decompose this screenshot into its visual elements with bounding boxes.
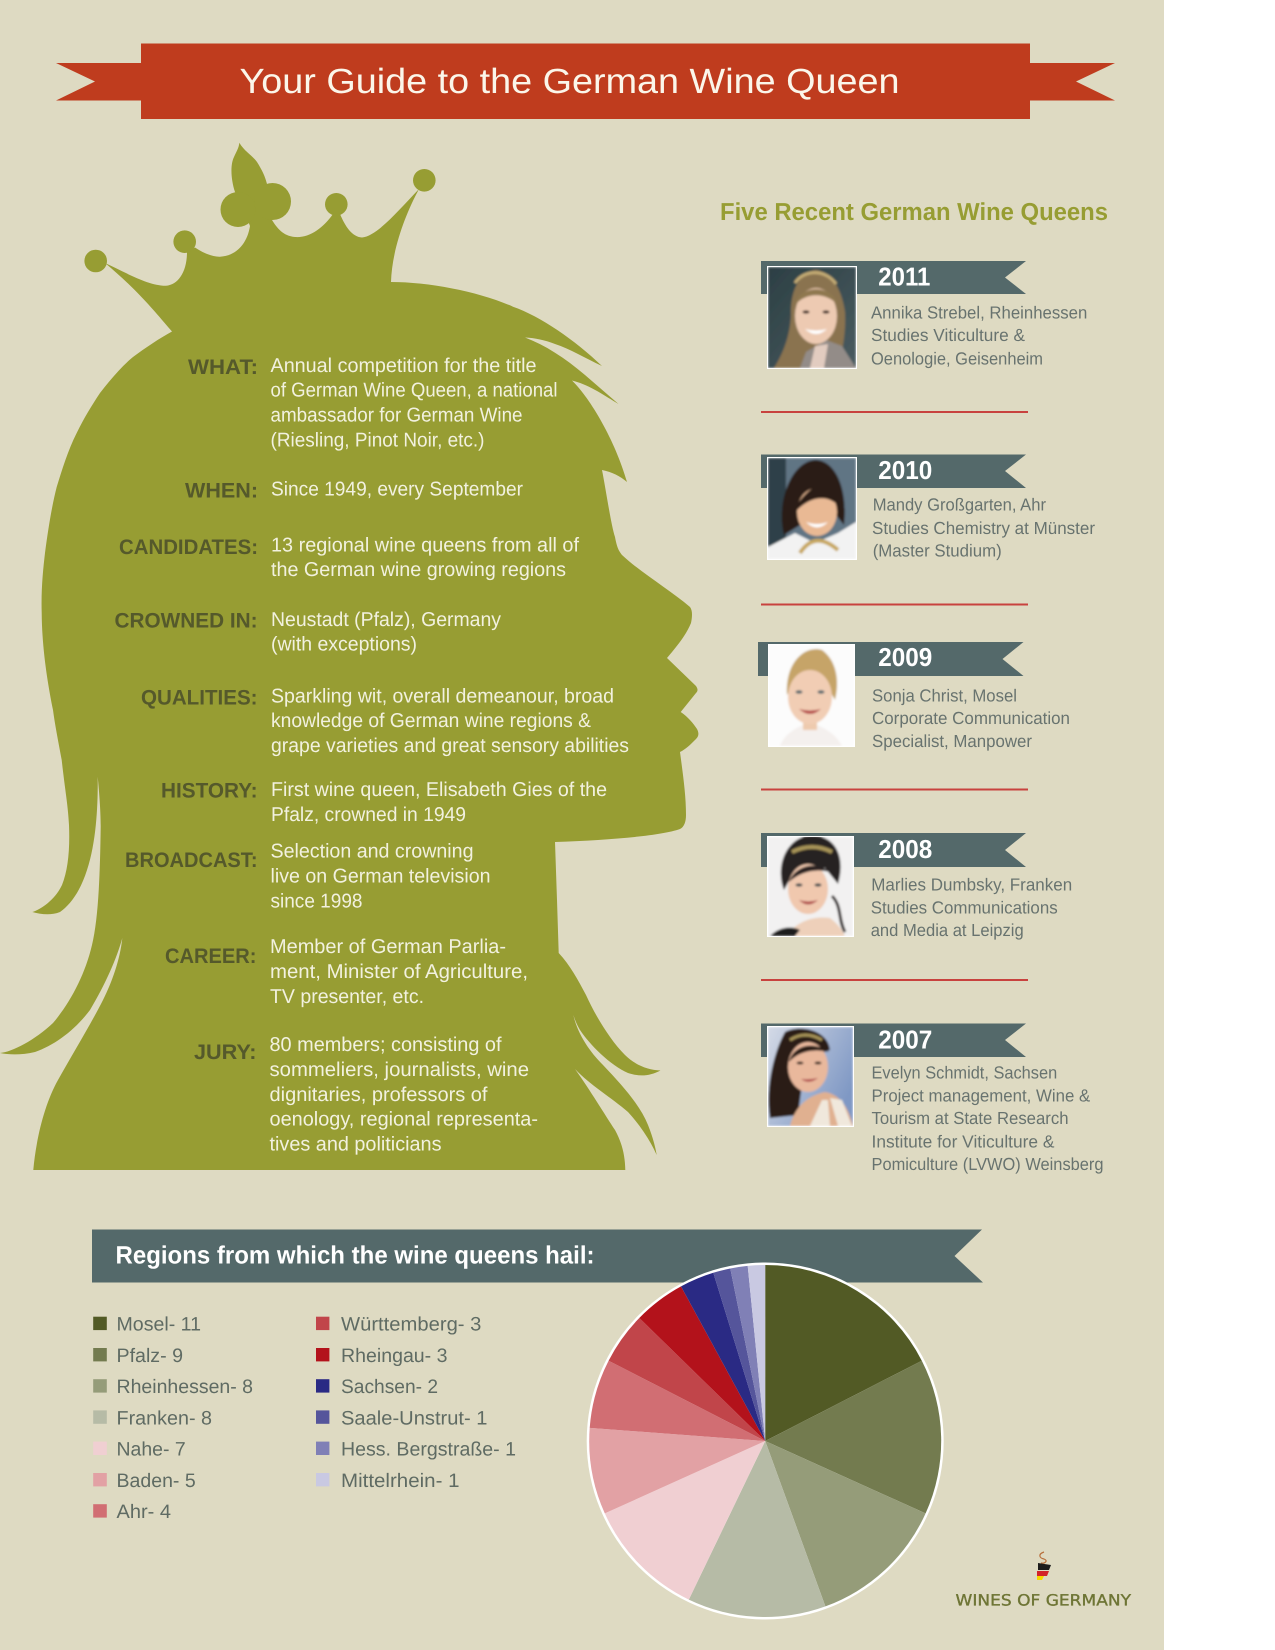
legend column 1: Ahr- 4 bbox=[116, 1501, 171, 1523]
panel: queen silhouette with facts bbox=[0, 143, 698, 1170]
bio 2007: Project management, Wine & bbox=[872, 1086, 1091, 1106]
fact: candidates: CANDIDATES: bbox=[119, 536, 258, 559]
photo 2009 bbox=[768, 644, 855, 747]
pie chart: regions bbox=[587, 1262, 944, 1620]
bio 2008: Marlies Dumbsky, Franken bbox=[871, 875, 1072, 895]
title banner bbox=[56, 44, 1115, 119]
panel: queen 2009 bbox=[758, 642, 1070, 751]
bio 2009: Corporate Communication bbox=[872, 708, 1070, 728]
fact: jury bbox=[194, 1034, 538, 1156]
legend column 1: Franken- 8 bbox=[116, 1407, 212, 1429]
fact: what: of German Wine Queen, a national bbox=[270, 380, 558, 402]
fact: jury: sommeliers, journalists, wine bbox=[270, 1059, 529, 1081]
fact: broadcast bbox=[125, 840, 490, 912]
fact: crowned in: CROWNED IN: bbox=[114, 610, 258, 632]
fact: jury: JURY: bbox=[194, 1041, 256, 1064]
legend column 1: Rheinhessen- 8 bbox=[116, 1376, 253, 1398]
bio 2007 bbox=[872, 1062, 1104, 1174]
bio 2007: Pomiculture (LVWO) Weinsberg bbox=[872, 1154, 1104, 1174]
photo 2011 bbox=[767, 266, 857, 369]
year 2010: 2010 bbox=[878, 455, 932, 485]
bio 2009: Specialist, Manpower bbox=[872, 731, 1032, 751]
year 2011: 2011 bbox=[878, 262, 930, 292]
bio 2011 bbox=[871, 302, 1087, 368]
fact: career: Member of German Parlia- bbox=[270, 936, 506, 958]
fact: qualities bbox=[141, 686, 629, 757]
panel: queen 2010 bbox=[761, 454, 1095, 561]
ribbon 2007 bbox=[761, 1024, 1026, 1057]
bio 2009: Sonja Christ, Mosel bbox=[872, 686, 1017, 706]
fact: jury: 80 members; consisting of bbox=[270, 1034, 502, 1056]
year 2009: 2009 bbox=[878, 642, 932, 672]
legend column 2: Hess. Bergstraße- 1 bbox=[341, 1439, 516, 1461]
logo: wines of germany: WINES OF GERMANY bbox=[956, 1592, 1132, 1610]
fact: history: HISTORY: bbox=[161, 780, 258, 802]
fact: when: WHEN: bbox=[185, 480, 258, 502]
photo 2007 bbox=[767, 1026, 854, 1127]
bio 2010: Mandy Großgarten, Ahr bbox=[873, 495, 1046, 515]
bio 2007: Evelyn Schmidt, Sachsen bbox=[872, 1062, 1057, 1082]
legend column 1: Pfalz- 9 bbox=[116, 1345, 183, 1367]
fact: history bbox=[161, 779, 607, 826]
year 2007: 2007 bbox=[878, 1025, 932, 1055]
bio 2010: (Master Studium) bbox=[873, 541, 1002, 561]
fact: broadcast: since 1998 bbox=[270, 890, 362, 912]
regions ribbon heading bbox=[92, 1230, 983, 1282]
bio 2008: and Media at Leipzig bbox=[871, 920, 1024, 940]
fact: broadcast: live on German television bbox=[270, 866, 490, 888]
photo 2010 bbox=[767, 457, 857, 560]
bio 2011: Studies Viticulture & bbox=[871, 325, 1025, 345]
fact: what: (Riesling, Pinot Noir, etc.) bbox=[270, 430, 484, 452]
fact: what: Annual competition for the title bbox=[270, 355, 536, 377]
fact: qualities: grape varieties and great sensory abilities bbox=[271, 735, 629, 757]
fact: when bbox=[185, 478, 523, 502]
ribbon 2011 bbox=[761, 261, 1026, 294]
legend column 1 bbox=[93, 1314, 253, 1523]
legend column 2: Württemberg- 3 bbox=[341, 1314, 481, 1336]
ribbon 2010 bbox=[761, 454, 1026, 488]
fact: when: Since 1949, every September bbox=[271, 478, 523, 500]
legend column 1: Mosel- 11 bbox=[116, 1314, 201, 1336]
fact: candidates: the German wine growing regions bbox=[271, 559, 566, 581]
title: Your Guide to the German Wine Queen bbox=[240, 62, 900, 101]
bio 2011: Oenologie, Geisenheim bbox=[871, 348, 1043, 368]
fact: qualities: QUALITIES: bbox=[141, 686, 258, 710]
fact: broadcast: BROADCAST: bbox=[125, 849, 258, 872]
icon: german flag bottle bbox=[1037, 1552, 1051, 1580]
fact: career: ment, Minister of Agriculture, bbox=[270, 961, 528, 983]
legend column 1: Nahe- 7 bbox=[116, 1439, 186, 1461]
fact: jury: dignitaries, professors of bbox=[270, 1084, 488, 1106]
fact: jury: tives and politicians bbox=[270, 1134, 442, 1156]
year 2008: 2008 bbox=[878, 834, 932, 864]
photo 2008 bbox=[767, 836, 854, 937]
fact: jury: oenology, regional representa- bbox=[270, 1109, 538, 1131]
bio 2008: Studies Communications bbox=[871, 898, 1058, 918]
legend column 2: Rheingau- 3 bbox=[341, 1345, 448, 1367]
panel: queen 2007 bbox=[761, 1024, 1104, 1174]
fact: crowned in: (with exceptions) bbox=[271, 634, 417, 656]
fact: career: TV presenter, etc. bbox=[270, 986, 424, 1008]
legend column 1: Baden- 5 bbox=[116, 1470, 196, 1492]
bio 2007: Tourism at State Research bbox=[872, 1108, 1068, 1128]
fact: history: First wine queen, Elisabeth Gies of the bbox=[271, 779, 607, 801]
legend column 2: Mittelrhein- 1 bbox=[341, 1470, 460, 1492]
fact: career bbox=[165, 936, 528, 1008]
panel: queen 2011 bbox=[761, 261, 1087, 369]
regions ribbon heading: Regions from which the wine queens hail: bbox=[116, 1241, 594, 1269]
fact: history: Pfalz, crowned in 1949 bbox=[271, 804, 466, 826]
legend: regions bbox=[93, 1314, 516, 1523]
bio 2007: Institute for Viticulture & bbox=[872, 1131, 1055, 1151]
fact: candidates bbox=[119, 534, 579, 581]
silhouette: crowned queen profile bbox=[0, 143, 698, 1170]
fact: broadcast: Selection and crowning bbox=[270, 840, 474, 862]
ribbon 2008 bbox=[761, 833, 1026, 867]
fact: career: CAREER: bbox=[165, 945, 256, 968]
bio 2010 bbox=[872, 495, 1095, 561]
bio 2008 bbox=[871, 875, 1072, 940]
fact: crowned in bbox=[114, 609, 501, 656]
legend column 2 bbox=[316, 1314, 516, 1492]
fact: what: WHAT: bbox=[188, 356, 258, 379]
ribbon 2009 bbox=[758, 642, 1024, 676]
fact: qualities: Sparkling wit, overall demeanour, broad bbox=[271, 686, 614, 708]
legend column 2: Sachsen- 2 bbox=[341, 1376, 438, 1398]
heading: five recent queens: Five Recent German Wine Queens bbox=[720, 199, 1108, 226]
bio 2010: Studies Chemistry at Münster bbox=[872, 518, 1095, 538]
fact: candidates: 13 regional wine queens from all of bbox=[271, 534, 579, 556]
bio 2011: Annika Strebel, Rheinhessen bbox=[871, 302, 1087, 322]
logo: wines of germany bbox=[956, 1552, 1132, 1610]
bio 2009 bbox=[872, 686, 1070, 751]
fact: qualities: knowledge of German wine regions & bbox=[271, 710, 592, 732]
legend column 2: Saale-Unstrut- 1 bbox=[341, 1407, 488, 1429]
panel: queen 2008 bbox=[761, 833, 1072, 940]
fact: crowned in: Neustadt (Pfalz), Germany bbox=[271, 609, 501, 631]
fact: what bbox=[188, 355, 558, 452]
fact: what: ambassador for German Wine bbox=[270, 404, 522, 426]
